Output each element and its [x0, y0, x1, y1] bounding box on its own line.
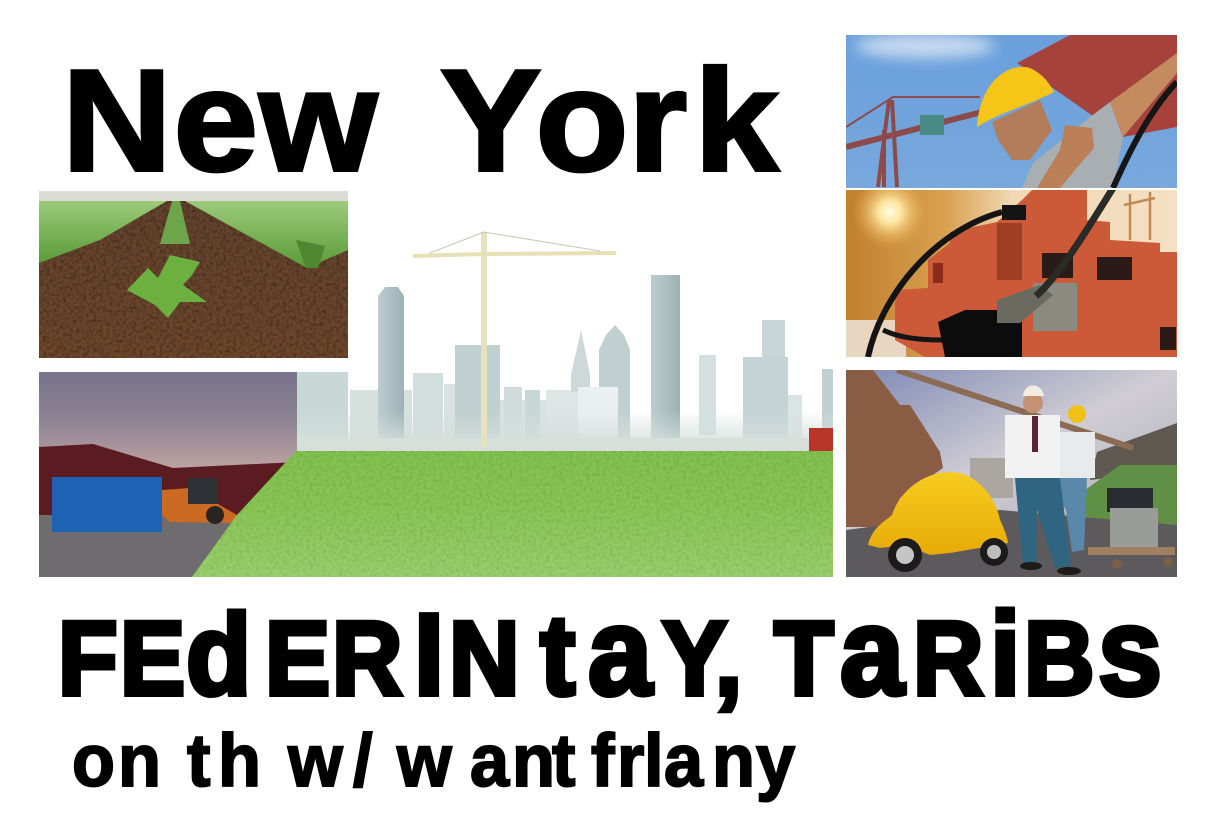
- panel: bricks and cable photo: [846, 174, 1177, 357]
- tagline: y: [756, 720, 795, 802]
- tagline: [72, 720, 795, 802]
- shirt: [1022, 102, 1123, 188]
- loader: [162, 478, 237, 524]
- panel: engineers with yellow car photo: [846, 370, 1177, 577]
- crane: [413, 232, 616, 447]
- tagline: /: [353, 720, 392, 802]
- tagline: t: [552, 720, 575, 802]
- title: k: [694, 39, 779, 202]
- subtitle: s: [1098, 584, 1162, 721]
- subtitle: I: [414, 590, 444, 719]
- panel: farm field photo: [39, 191, 348, 358]
- panel: worker and crane photo: [846, 34, 1177, 188]
- hard hat: [977, 67, 1054, 127]
- tagline: n: [118, 720, 180, 802]
- cables and plug: [868, 188, 1113, 357]
- title: r: [628, 39, 687, 202]
- panel: warehouse with container: [39, 372, 297, 577]
- tagline: w: [396, 720, 453, 802]
- tagline: a: [470, 720, 510, 802]
- subtitle: t: [540, 592, 575, 719]
- title: Y: [440, 39, 541, 202]
- red box: [809, 428, 833, 453]
- title: e: [173, 39, 258, 202]
- lead engineer: [1005, 386, 1081, 575]
- title: N: [62, 39, 172, 202]
- subtitle: E: [265, 600, 330, 717]
- seedling: [127, 255, 207, 318]
- subtitle: R: [913, 600, 983, 717]
- tagline: n: [712, 720, 755, 802]
- subtitle: F: [58, 600, 118, 717]
- tagline: h: [218, 720, 280, 802]
- subtitle: B: [1024, 600, 1095, 717]
- second engineer: [1057, 405, 1095, 552]
- cable: [1113, 82, 1177, 188]
- tagline: o: [72, 720, 115, 802]
- shipping container: [52, 477, 162, 532]
- panel: central skyline and crane: [297, 232, 833, 453]
- title: [62, 39, 779, 202]
- arm: [1110, 53, 1177, 137]
- subtitle: ,: [715, 600, 769, 717]
- subtitle: a: [840, 584, 905, 721]
- subtitle: d: [186, 590, 251, 719]
- tagline: t: [187, 720, 210, 802]
- crane: [846, 97, 982, 187]
- title: o: [536, 39, 628, 202]
- subtitle: [58, 584, 1162, 721]
- tagline: n: [512, 720, 555, 802]
- title: w: [258, 39, 420, 202]
- subtitle: R: [332, 600, 403, 717]
- tagline: r: [617, 720, 644, 802]
- tagline: w: [287, 720, 344, 802]
- brick containers: [895, 190, 1177, 357]
- subtitle: T: [774, 600, 834, 717]
- subtitle: Y: [662, 600, 727, 717]
- cart: [1088, 488, 1175, 569]
- subtitle: E: [120, 600, 185, 717]
- scaffold: [1124, 192, 1155, 240]
- panel: green field: [190, 451, 835, 577]
- tagline: l: [644, 720, 664, 802]
- subtitle: a: [588, 584, 654, 721]
- subtitle: N: [449, 600, 520, 717]
- yellow car: [868, 472, 1008, 572]
- tagline: a: [664, 720, 704, 802]
- subtitle: i: [990, 589, 1020, 720]
- face: [992, 100, 1052, 160]
- tagline: f: [591, 720, 615, 802]
